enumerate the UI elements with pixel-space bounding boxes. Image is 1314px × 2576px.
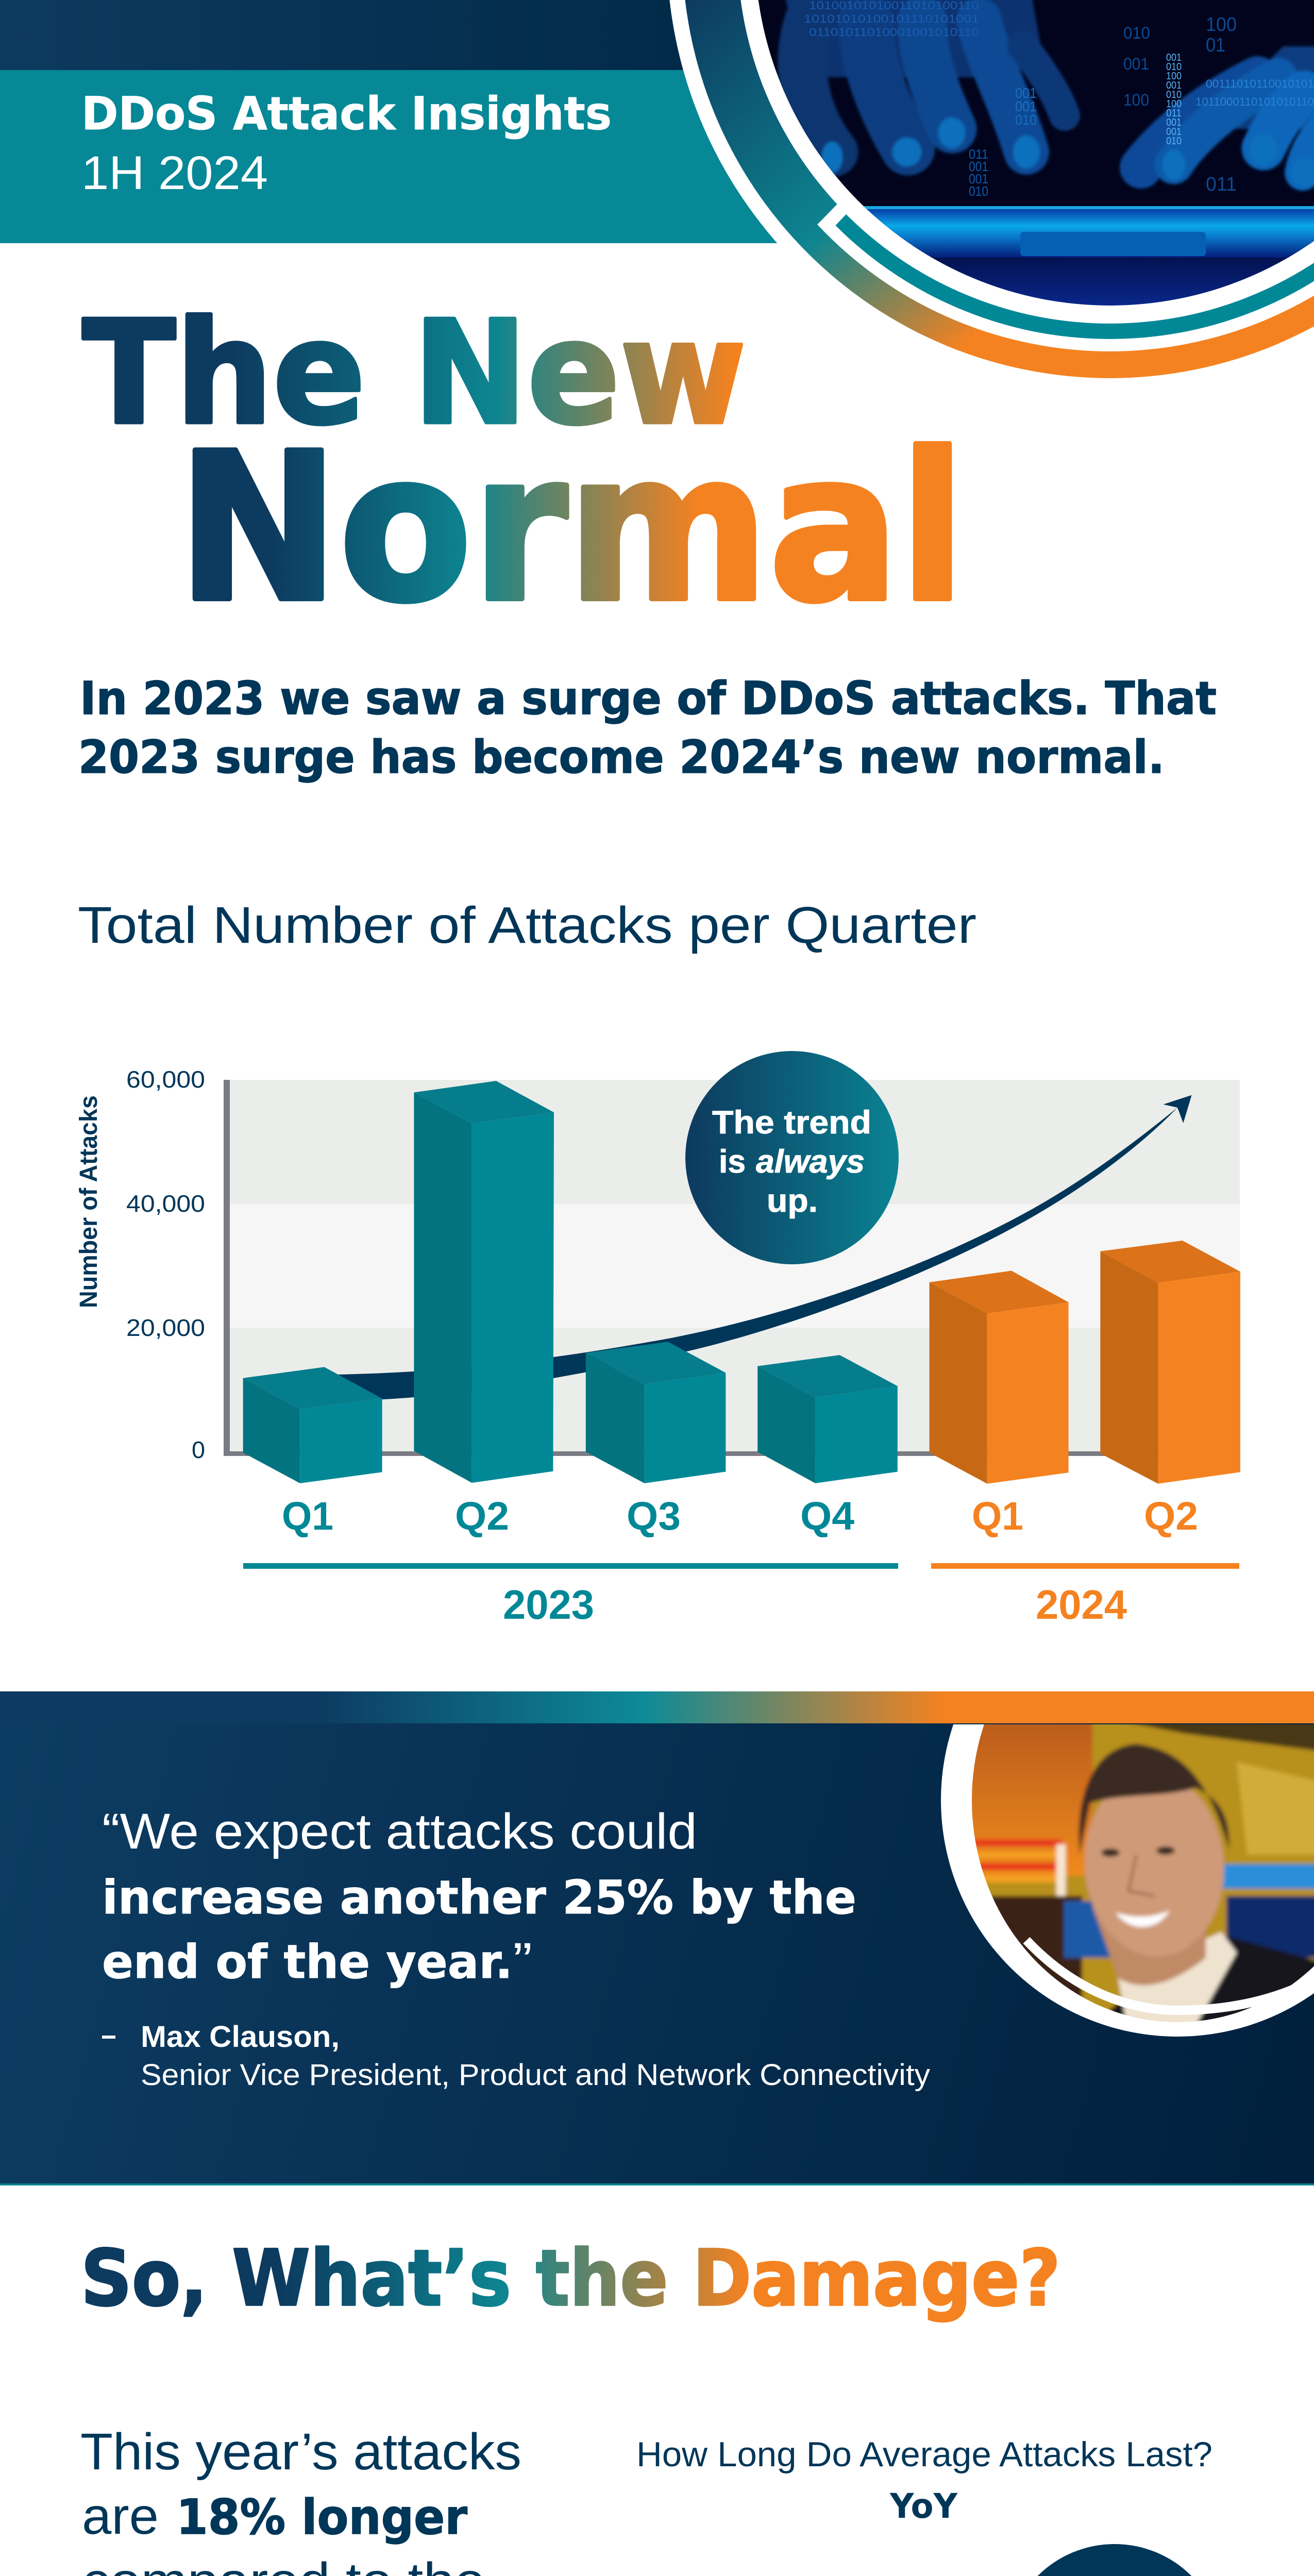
binary code overlay: 010 <box>1015 112 1037 128</box>
attribution <box>102 2020 930 2092</box>
text block: 18% longer: 18% longer <box>176 2489 468 2546</box>
chart: attack duration <box>552 2544 1238 2576</box>
y axis labels: 20,000 <box>126 1314 205 1341</box>
binary code overlay: 001 <box>1166 117 1182 128</box>
binary code overlay: 001 <box>1166 126 1182 138</box>
binary code overlay: 01101011010001001010110 <box>809 26 979 39</box>
x axis quarter labels <box>282 1494 1198 1538</box>
binary code overlay: 001 <box>969 171 988 187</box>
binary code overlay: 001 <box>1166 80 1182 91</box>
year group: 2023 <box>243 1563 898 1628</box>
binary code overlay: 011 <box>1206 174 1237 195</box>
decorative rings and hero photo <box>667 0 1314 394</box>
text block: 18% longer: This year’s attacks <box>80 2423 521 2481</box>
binary code overlay: 001 <box>1015 98 1037 114</box>
bar: 2023 Q3 <box>586 1342 726 1483</box>
binary code overlay: 011 <box>1166 108 1182 119</box>
header banner <box>0 0 824 243</box>
panel: executive quote <box>0 1691 1314 2185</box>
callout: +18% <box>1006 2544 1223 2576</box>
binary code overlay: 10101010100101110101001 <box>804 12 979 25</box>
binary code overlay: 010 <box>1166 135 1182 147</box>
y axis labels: 0 <box>192 1436 205 1463</box>
bar: 2024 Q2 <box>1100 1241 1240 1484</box>
bar: 2023 Q2 <box>414 1081 554 1483</box>
y axis labels: 40,000 <box>126 1190 205 1217</box>
title: The New: The New <box>82 291 746 456</box>
callout: the trend is always up <box>685 1051 899 1264</box>
portrait photo <box>941 1724 1314 2037</box>
lead paragraph: 2023 surge has become 2024’s new normal. <box>78 731 1165 784</box>
quote text: increase another 25% by the <box>102 1871 856 1925</box>
binary code overlay: 010 <box>969 183 988 199</box>
quote text: ” <box>513 1933 532 1989</box>
callout: the trend is always up: is <box>719 1144 746 1180</box>
binary code overlay: 00111010110010101 <box>1206 77 1314 90</box>
heading: attack duration chart: How Long Do Average Attacks Last? <box>636 2435 1212 2474</box>
heading: attack duration chart: YoY <box>889 2486 958 2526</box>
year group: 2024: 2024 <box>1036 1582 1127 1628</box>
plot background <box>224 1080 1240 1456</box>
binary code overlay: 010 <box>1166 61 1182 73</box>
binary code overlay: 01 <box>1206 35 1225 56</box>
heading: so what's the damage: So, What’s the Damage? <box>81 2234 1060 2324</box>
hero photo: hands typing on keyboard <box>747 0 1314 313</box>
chart: attacks per quarter <box>75 1051 1240 1628</box>
quote text: end of the year. <box>102 1935 513 1989</box>
y axis title: Number of Attacks <box>75 1095 103 1308</box>
y axis labels: 60,000 <box>126 1066 205 1093</box>
x axis quarter labels: Q3 <box>627 1494 681 1538</box>
lead paragraph: In 2023 we saw a surge of DDoS attacks. That <box>80 672 1217 725</box>
text block: 18% longer <box>80 2423 521 2576</box>
binary code overlay: 100 <box>1166 71 1182 82</box>
year group: 2023: 2023 <box>503 1582 594 1628</box>
attribution: Max Clauson, <box>141 2020 340 2054</box>
banner subtitle: 1H 2024 <box>81 147 268 199</box>
binary code overlay: 100 <box>1166 98 1182 110</box>
binary code overlay: 100 <box>1123 91 1149 109</box>
year group: 2024 <box>931 1563 1239 1628</box>
binary code overlay: 001 <box>1166 52 1182 63</box>
callout: the trend is always up: up. <box>767 1183 818 1219</box>
title: Normal: Normal <box>177 410 966 647</box>
binary code overlay: 001 <box>969 159 988 174</box>
bar: 2023 Q4 <box>757 1355 898 1483</box>
attribution: Senior Vice President, Product and Network Connectivity <box>141 2058 930 2092</box>
banner title: DDoS Attack Insights <box>81 87 612 140</box>
x axis quarter labels: Q2 <box>1144 1494 1198 1538</box>
x axis quarter labels: Q1 <box>972 1494 1023 1538</box>
binary code overlay: 010 <box>1123 24 1150 42</box>
callout: the trend is always up: The trend <box>712 1105 871 1141</box>
quote text <box>102 1803 856 1989</box>
binary code overlay: 001 <box>1015 85 1037 101</box>
bar: 2023 Q1 <box>243 1367 382 1483</box>
quote text: “We expect attacks could <box>102 1803 697 1859</box>
binary code overlay: 100 <box>1206 14 1237 36</box>
text block: 18% longer: are <box>82 2487 159 2545</box>
x axis quarter labels: Q1 <box>282 1494 333 1538</box>
lead paragraph <box>78 672 1217 784</box>
x axis quarter labels: Q4 <box>800 1494 854 1538</box>
callout: the trend is always up: always <box>756 1144 865 1180</box>
bar: 2024 Q1 <box>930 1271 1069 1484</box>
binary code overlay: 1011000110101010110 <box>1195 95 1314 108</box>
heading: attacks per quarter: Total Number of Attacks per Quarter <box>78 896 976 954</box>
binary code overlay: 011 <box>969 146 988 162</box>
trend arrow <box>335 1095 1192 1399</box>
heading: attack duration chart <box>636 2435 1212 2526</box>
binary code overlay <box>804 0 1314 199</box>
y axis labels <box>126 1066 205 1463</box>
binary code overlay: 001 <box>1123 55 1149 73</box>
bars <box>243 1081 1240 1484</box>
x axis quarter labels: Q2 <box>455 1494 509 1538</box>
binary code overlay: 010 <box>1166 89 1182 100</box>
